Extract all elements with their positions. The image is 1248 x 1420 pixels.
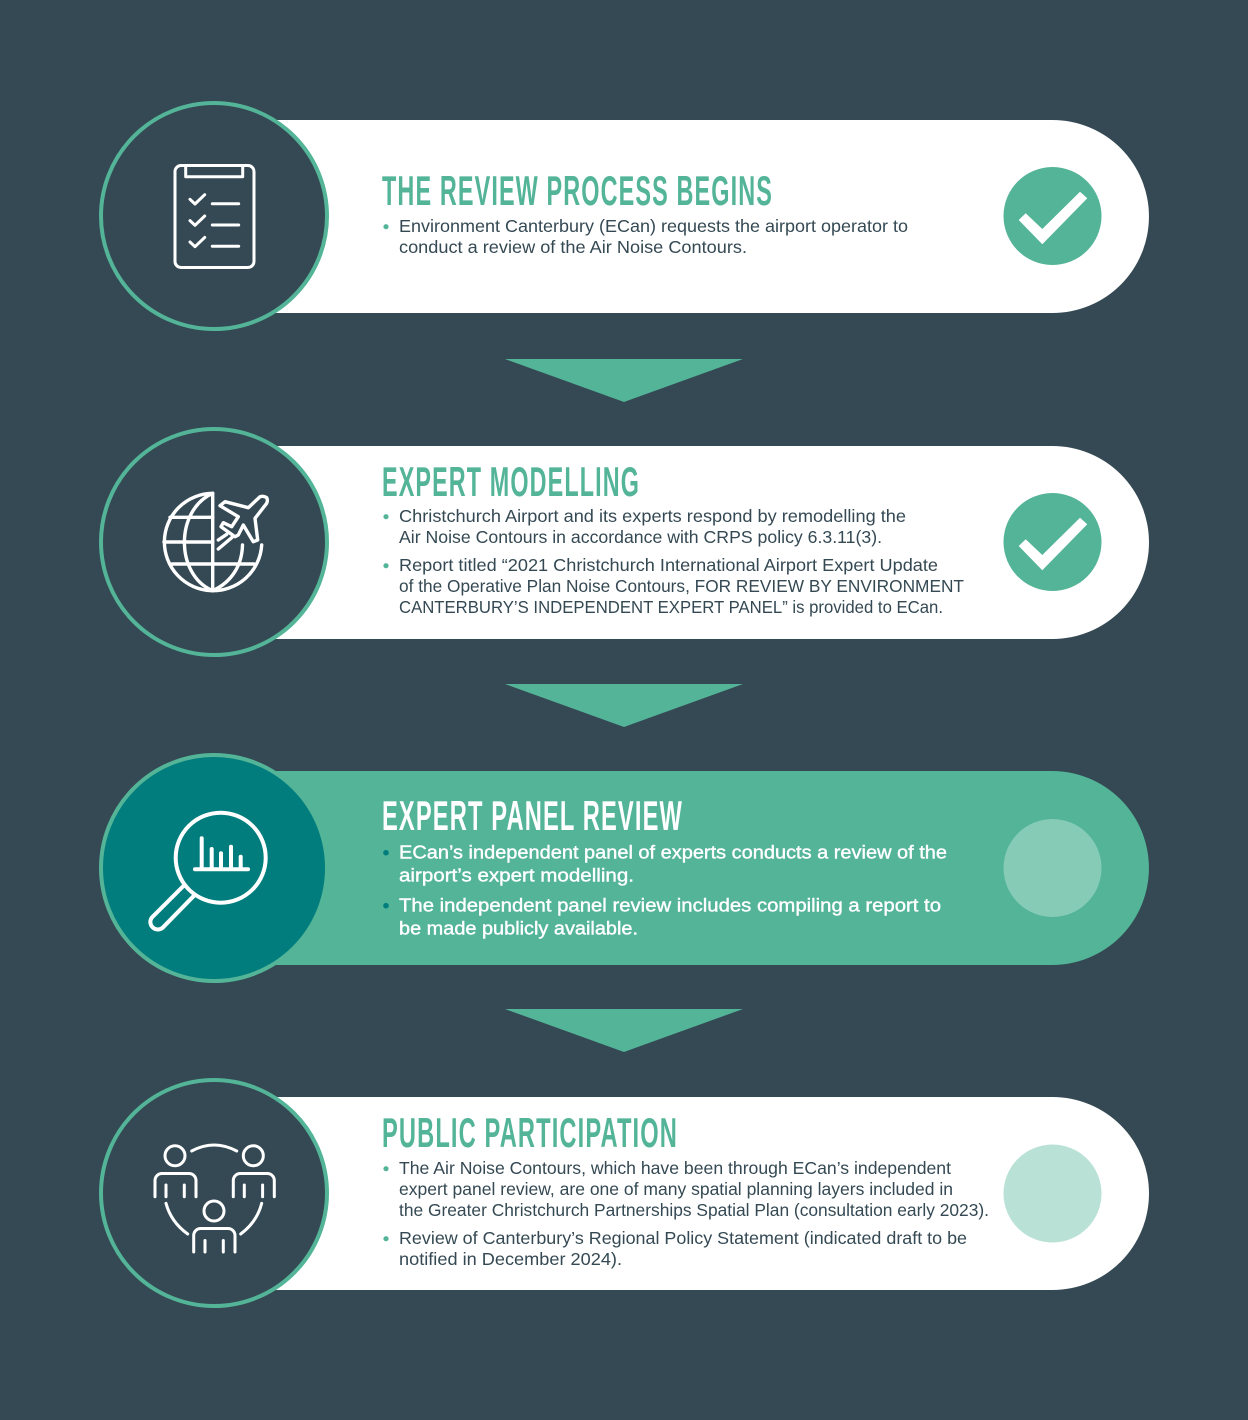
bullet text: of the Operative Plan Noise Contours, FOR REVIEW BY ENVIRONMENT — [399, 576, 964, 596]
status: completed check — [1004, 167, 1102, 265]
arrow 3 — [505, 1009, 743, 1052]
bullet text: Air Noise Contours in accordance with CRPS policy 6.3.11(3). — [399, 527, 882, 547]
bullet text: be made publicly available. — [399, 918, 638, 938]
bullet text: the Greater Christchurch Partnerships Spatial Plan (consultation early 2023). — [399, 1200, 989, 1220]
bullet text — [383, 506, 964, 617]
icon circle — [101, 103, 327, 329]
heading: EXPERT PANEL REVIEW — [382, 792, 683, 839]
status: in progress dot — [1004, 819, 1102, 917]
icon circle — [101, 755, 327, 981]
bullet text: conduct a review of the Air Noise Contours. — [399, 237, 747, 257]
panel: the review process begins — [101, 103, 1149, 329]
heading: EXPERT MODELLING — [382, 458, 640, 505]
arrow 2 — [505, 684, 743, 727]
bullet text: expert panel review, are one of many spatial planning layers included in — [399, 1179, 953, 1199]
bullet text: airport’s expert modelling. — [399, 864, 634, 886]
pill background — [214, 1097, 1149, 1290]
bullet text — [383, 1158, 989, 1269]
bullet text: Report titled “2021 Christchurch International Airport Expert Update — [399, 555, 938, 575]
icon circle — [101, 1080, 327, 1306]
icon: clipboard checklist — [175, 166, 254, 268]
bullet text: notified in December 2024). — [399, 1249, 622, 1269]
panel: public participation — [101, 1080, 1149, 1306]
status: completed check — [1004, 493, 1102, 591]
bullet text: Christchurch Airport and its experts respond by remodelling the — [399, 506, 906, 526]
bullet text: ECan’s independent panel of experts conducts a review of the — [399, 842, 947, 862]
status: upcoming dot — [1004, 1144, 1102, 1242]
bullet text: CANTERBURY’S INDEPENDENT EXPERT PANEL” is provided to ECan. — [399, 597, 943, 617]
arrow 1 — [505, 359, 743, 402]
bullet text — [383, 842, 947, 938]
bullet text: The Air Noise Contours, which have been through ECan’s independent — [399, 1158, 951, 1178]
pill background — [214, 771, 1149, 965]
bullet text: The independent panel review includes compiling a report to — [399, 894, 941, 916]
icon: globe and plane — [164, 493, 267, 591]
panel: expert panel review — [101, 755, 1149, 981]
bullet text — [383, 216, 908, 257]
bullet text: Review of Canterbury’s Regional Policy Statement (indicated draft to be — [399, 1228, 967, 1248]
icon circle — [101, 429, 327, 655]
bullet text: Environment Canterbury (ECan) requests the airport operator to — [399, 216, 908, 236]
heading: THE REVIEW PROCESS BEGINS — [382, 167, 773, 214]
pill background — [214, 446, 1149, 639]
pill background — [214, 120, 1149, 313]
panel: expert modelling — [101, 429, 1149, 655]
icon: three people — [155, 1145, 274, 1252]
heading: PUBLIC PARTICIPATION — [382, 1109, 678, 1156]
icon: magnifier with bar chart — [150, 813, 266, 929]
